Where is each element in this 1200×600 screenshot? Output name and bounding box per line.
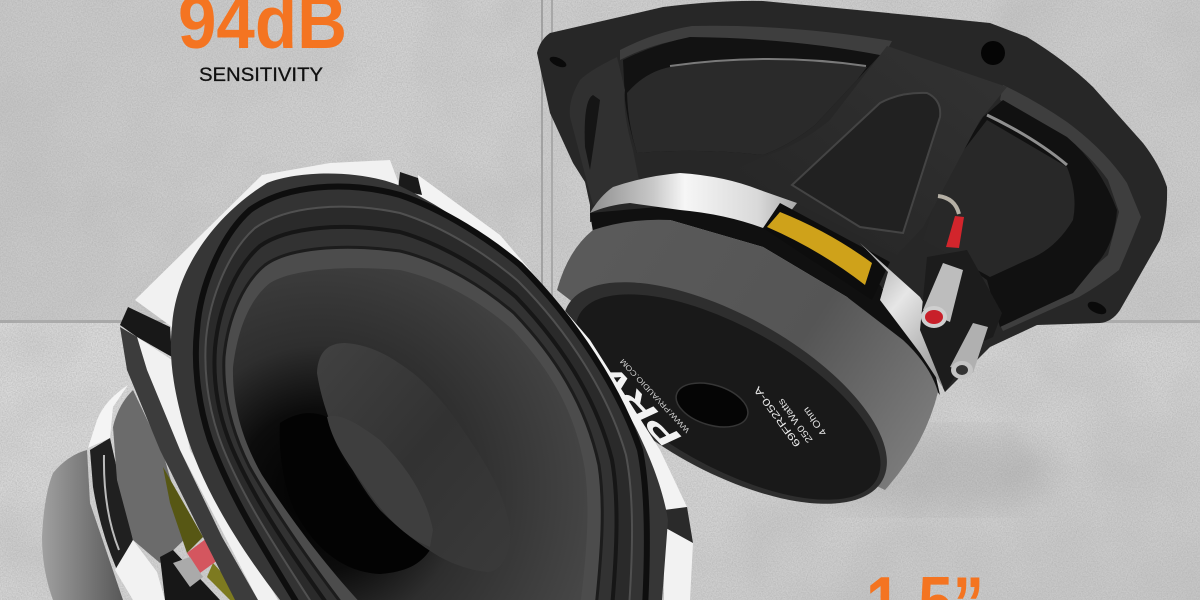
lower white bracket: [115, 540, 165, 600]
chrome ring right: [797, 203, 950, 388]
terminal block: [920, 250, 1002, 392]
throat: [280, 413, 430, 574]
terminal connector one: [921, 263, 963, 328]
terminal connector two: [950, 323, 988, 379]
basket arm centre: [730, 46, 1007, 255]
red sleeve: [946, 216, 964, 248]
lower-left white frame strip: [137, 337, 278, 600]
yellow spider strip: [767, 212, 872, 285]
magnet body: [557, 220, 938, 490]
frame notch: [120, 307, 172, 357]
website text: WWW.PRVAUDIO.COM: [618, 357, 691, 435]
rear gap: [90, 438, 133, 570]
silver screw: [173, 557, 203, 587]
floor shadow under right speaker: [800, 430, 1060, 510]
dust cap: [327, 416, 433, 547]
concrete wall background: [0, 0, 1200, 323]
mounting holes: [548, 41, 1108, 317]
plate hole: [671, 375, 753, 435]
upper lip: [620, 26, 892, 60]
red sleeve: [187, 538, 218, 573]
lower-right white bracket: [664, 527, 693, 600]
frame chrome upper right: [418, 175, 687, 512]
chrome ring: [590, 173, 797, 228]
speaker frame: [537, 1, 1167, 392]
arm inner panel: [792, 93, 940, 233]
yellow strip: [163, 467, 247, 600]
band below chrome: [590, 205, 940, 395]
chrome flange piece: [88, 385, 128, 448]
impedance text: 4 Ohm: [801, 404, 829, 438]
grey ring: [113, 390, 187, 563]
hardware: [160, 550, 220, 600]
braided wire: [938, 196, 959, 214]
right speaker: [530, 1, 1167, 548]
back plate rim: [530, 238, 920, 548]
front frame band: [171, 173, 668, 600]
concrete floor background: [0, 323, 1200, 600]
left speaker: [42, 160, 693, 600]
brand logo: PRV: [589, 352, 687, 455]
visible cone upper: [627, 60, 867, 155]
upper opening: [623, 37, 880, 155]
back plate: [545, 253, 911, 541]
horn: [317, 343, 510, 572]
right opening: [927, 100, 1117, 327]
right lip: [995, 85, 1141, 331]
lower-left grey frame strip: [120, 327, 258, 600]
rear magnet: [42, 450, 123, 600]
power text: 250 Watts: [776, 396, 815, 445]
cone: [233, 268, 587, 600]
model text: 69FR250-A: [752, 384, 803, 449]
sensitivity label: SENSITIVITY: [199, 65, 323, 86]
basket arm left: [570, 57, 640, 205]
visible cone right: [923, 120, 1075, 277]
frame chrome upper left: [135, 160, 400, 327]
yellow strip frame: [763, 203, 890, 300]
surround: [196, 187, 647, 600]
